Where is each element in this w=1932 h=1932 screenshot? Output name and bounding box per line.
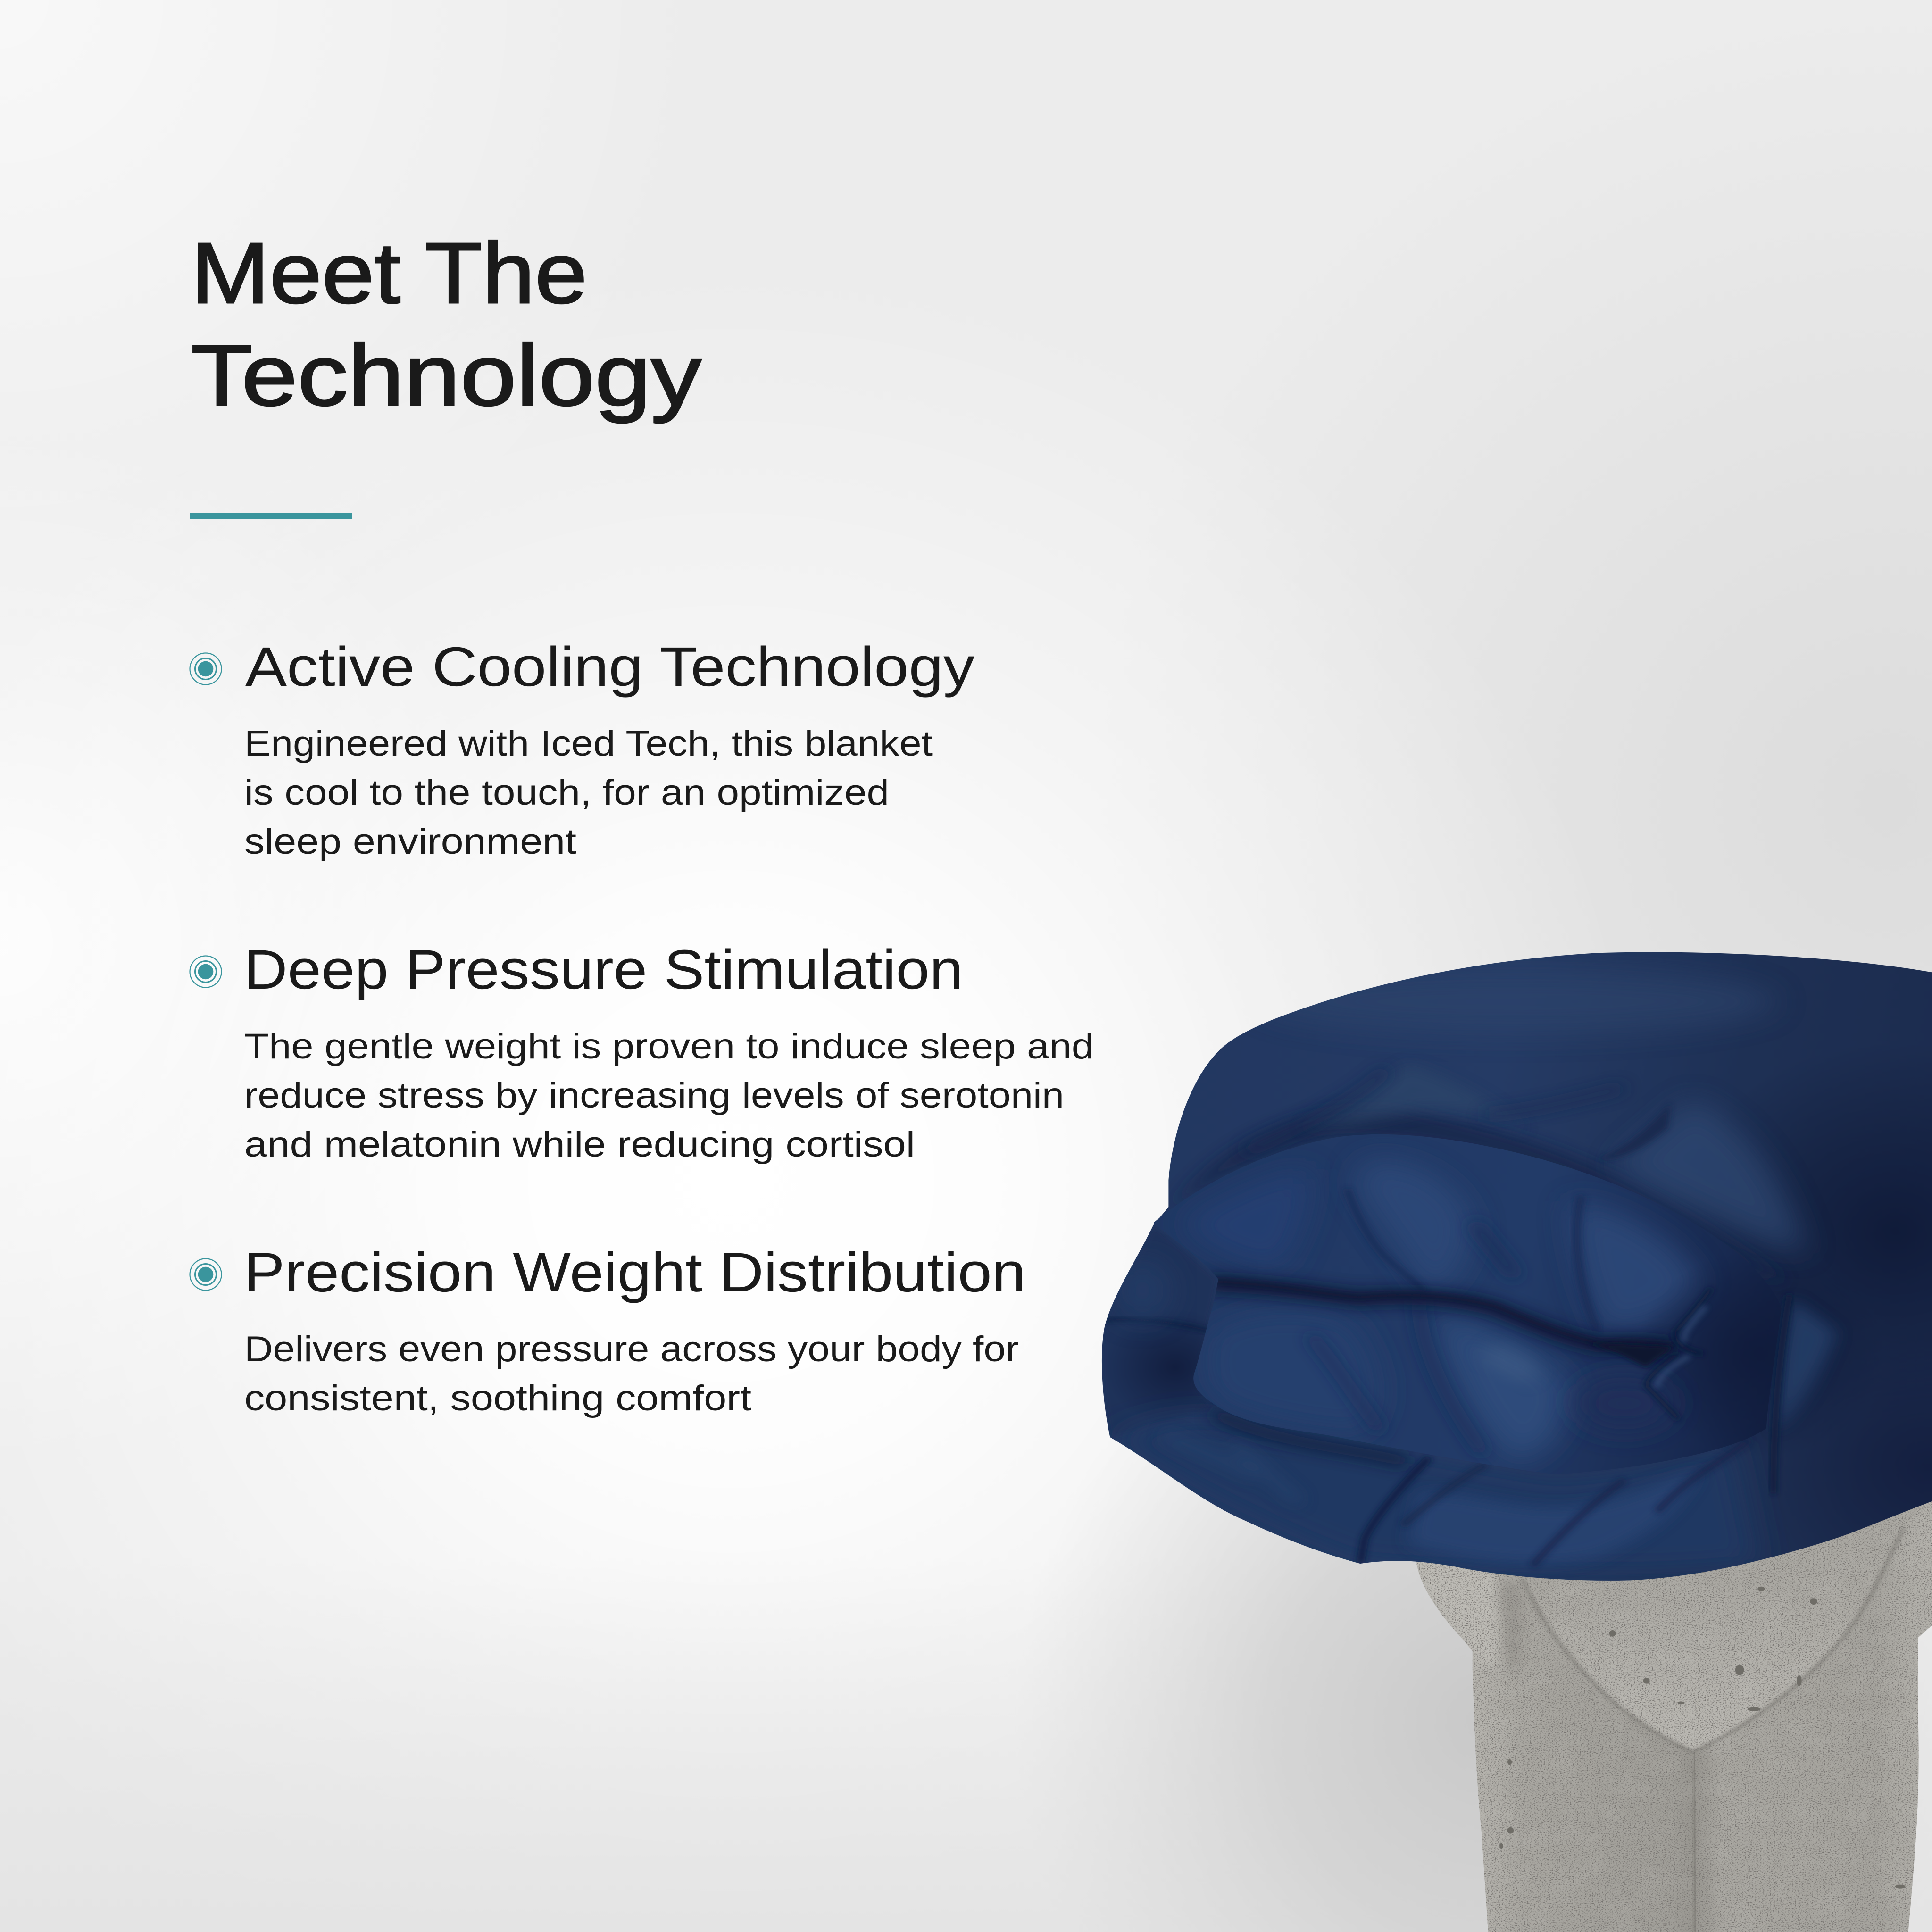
body text: deep pressure xyxy=(244,1026,1094,1165)
title: Meet The xyxy=(191,225,587,321)
title xyxy=(191,225,702,424)
body text: active cooling: Engineered with Iced Tech, this blanket xyxy=(244,724,933,764)
lower fold highlights xyxy=(1202,1309,1380,1435)
shadow above roll xyxy=(1153,1107,1787,1282)
icon: teal target bullet xyxy=(190,653,222,685)
body text: active cooling xyxy=(244,724,933,862)
face shape xyxy=(1556,1571,1846,1751)
teal divider rule xyxy=(190,513,352,519)
body text: precision weight: consistent, soothing comfort xyxy=(244,1378,751,1418)
heading: precision weight: Precision Weight Distribution xyxy=(244,1241,1026,1304)
body text: active cooling: is cool to the touch, for an optimized xyxy=(244,773,889,813)
body text: deep pressure: and melatonin while reducing cortisol xyxy=(244,1124,915,1165)
surface pits xyxy=(1499,1587,1905,1889)
upper fold highlights xyxy=(1181,1169,1311,1268)
icon: teal target bullet xyxy=(190,956,222,988)
feature: deep pressure xyxy=(190,939,1094,1165)
heading: deep pressure: Deep Pressure Stimulation xyxy=(244,939,963,1001)
inner rolled folds xyxy=(1137,1124,1814,1485)
bottom band xyxy=(1110,1416,1760,1575)
gathered wrinkles xyxy=(1646,1288,1711,1419)
left lobe xyxy=(1102,1225,1218,1437)
flap right of roll xyxy=(1776,1299,1837,1431)
dark right end of roll xyxy=(1598,1241,1814,1466)
concrete pedestal xyxy=(1402,1491,1932,1932)
navy folded blanket xyxy=(1083,934,1932,1611)
blanket outer shell xyxy=(1083,934,1932,1611)
body text: deep pressure: reduce stress by increasing levels of serotonin xyxy=(244,1075,1064,1116)
body text: active cooling: sleep environment xyxy=(244,822,576,862)
highlight on right shoulder xyxy=(1614,1099,1806,1255)
body text: precision weight xyxy=(244,1329,1019,1418)
heading: active cooling: Active Cooling Technology xyxy=(245,636,974,698)
body text: deep pressure: The gentle weight is proven to induce sleep and xyxy=(244,1026,1094,1066)
feature: precision weight xyxy=(190,1241,1026,1418)
body text: precision weight: Delivers even pressure across your body for xyxy=(244,1329,1019,1369)
feature: active cooling xyxy=(190,636,974,862)
title: Technology xyxy=(191,327,702,424)
crevice between folds xyxy=(1208,1284,1673,1349)
icon: teal target bullet xyxy=(190,1258,222,1291)
